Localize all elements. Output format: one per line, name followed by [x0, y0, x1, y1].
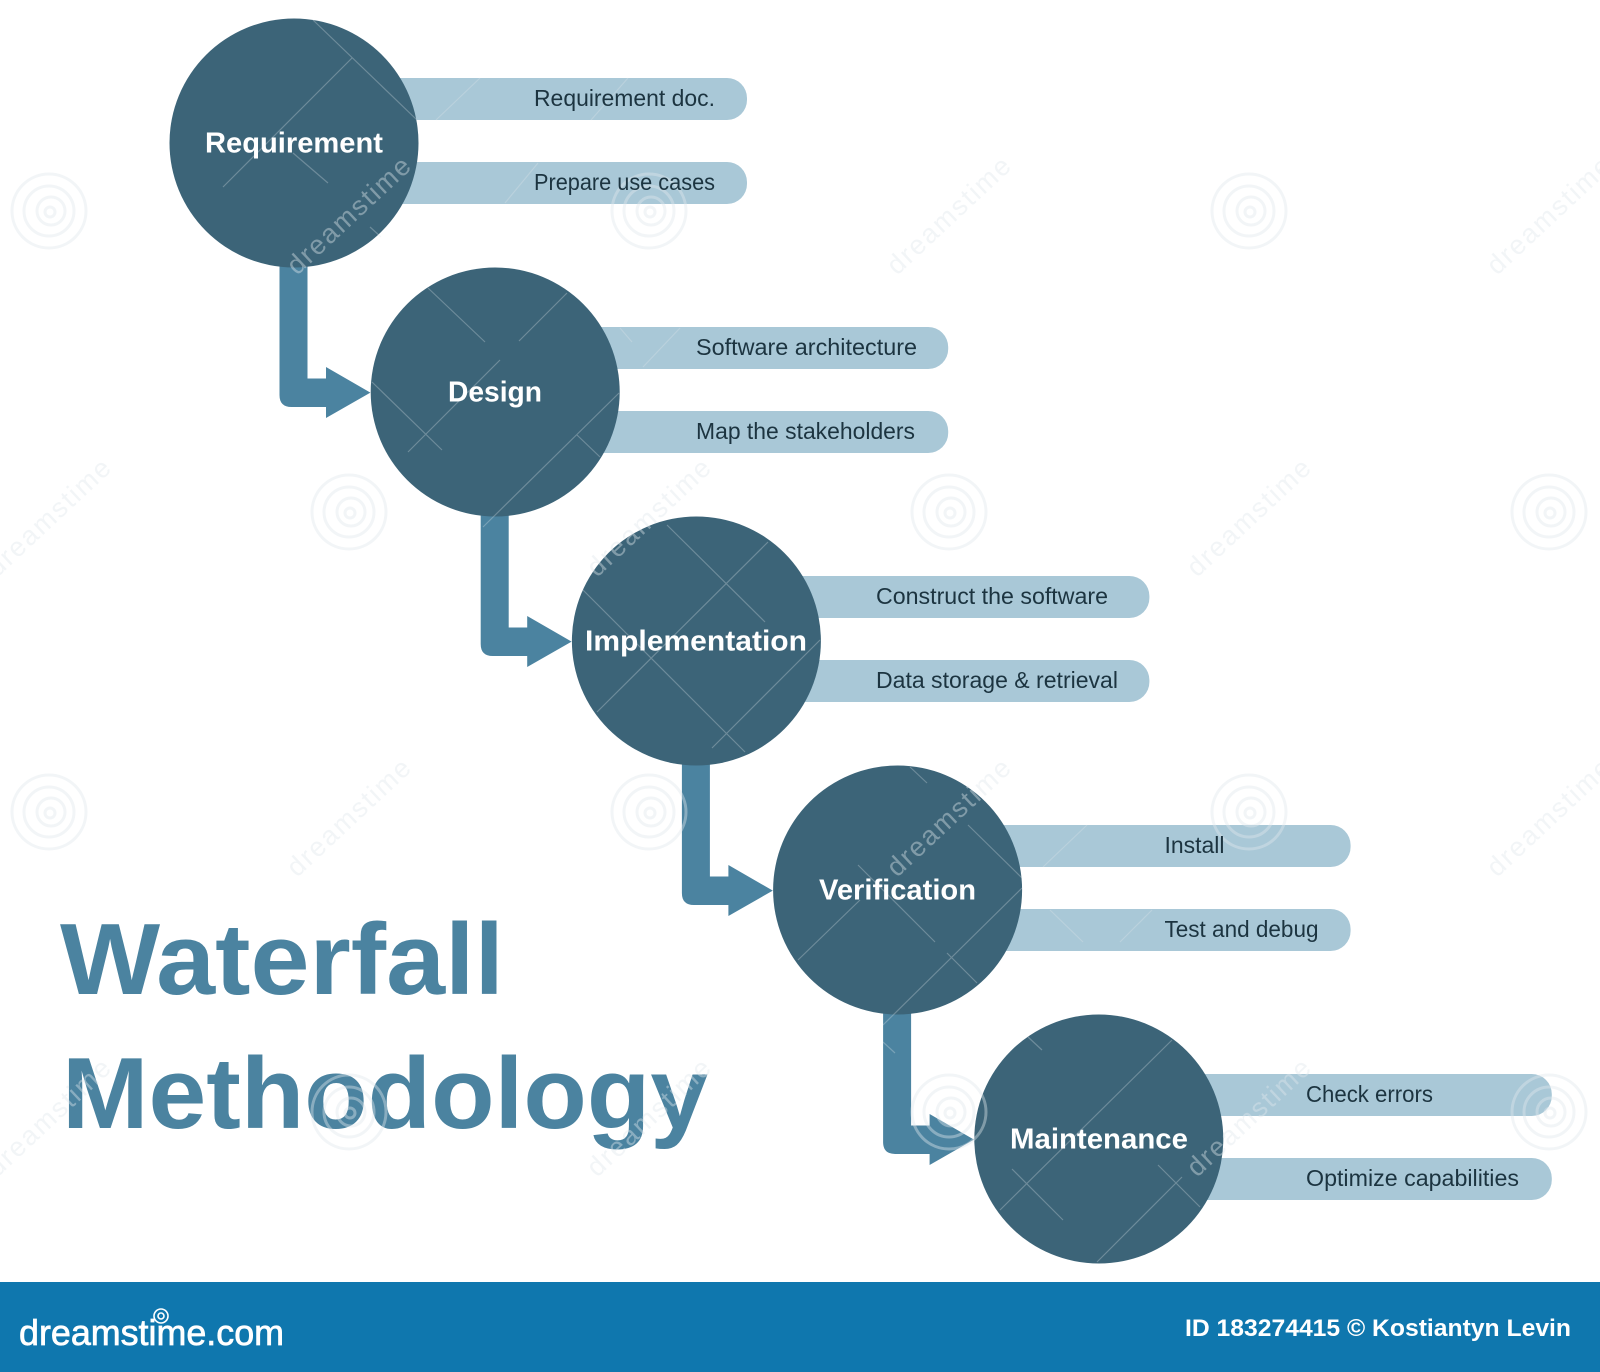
circle: design: [371, 268, 620, 516]
bar: check errors: [1159, 1074, 1552, 1116]
text: test and debug: Test and debug: [1164, 916, 1318, 942]
arrow: requirement to design: [280, 262, 370, 418]
text: software architecture: Software architecture: [696, 334, 917, 360]
bar: construct the software: [756, 576, 1149, 618]
footer band: [0, 1282, 1600, 1372]
bar: test and debug: [958, 909, 1351, 951]
text: check errors: Check errors: [1306, 1081, 1433, 1107]
bar: install: [958, 825, 1351, 867]
arrow: design to implementation: [481, 511, 572, 667]
watermark text: dreamstime: [281, 753, 417, 882]
text: requirement doc: Requirement doc.: [534, 85, 715, 111]
bar: software architecture: [555, 327, 948, 369]
step: verification: [773, 766, 1351, 1014]
step: maintenance: [974, 1014, 1552, 1264]
icon: logo spiral: [154, 1309, 168, 1323]
footer logo text: dreamstime.com: [19, 1312, 284, 1353]
title: Waterfall: [60, 904, 504, 1016]
watermark text: dreamstime: [281, 151, 417, 280]
label: maintenance: Maintenance: [1010, 1124, 1188, 1156]
label: requirement: Requirement: [205, 128, 383, 160]
text: data storage and retrieval: Data storage & retrieval: [876, 667, 1118, 693]
circle and bar labels: [205, 85, 1519, 1191]
text: map the stakeholders: Map the stakeholders: [696, 418, 915, 444]
step: implementation: [572, 516, 1149, 766]
text: construct the software: Construct the software: [876, 583, 1108, 609]
watermark text: [0, 151, 1600, 1182]
step: requirement: [170, 18, 747, 268]
bar: data storage and retrieval: [756, 660, 1149, 702]
arrow: implementation to verification: [682, 760, 773, 916]
watermark text: dreamstime: [1181, 1053, 1317, 1182]
watermark spirals: [12, 174, 1586, 1149]
watermark diagonal lines: [223, 20, 1200, 1262]
bar: prepare use cases: [354, 162, 747, 204]
bar: optimize capabilities: [1159, 1158, 1552, 1200]
text: optimize capabilities: Optimize capabilities: [1306, 1165, 1519, 1191]
watermark text: dreamstime: [1181, 453, 1317, 582]
circle: maintenance: [974, 1014, 1223, 1264]
footer credit: ID 183274415 © Kostiantyn Levin: [1185, 1315, 1571, 1342]
watermark text: dreamstime: [581, 453, 717, 582]
circle: implementation: [572, 516, 821, 766]
title: [60, 904, 708, 1150]
arrow: verification to maintenance: [883, 1009, 974, 1165]
circle: verification: [773, 766, 1022, 1014]
title: Methodology: [62, 1038, 708, 1150]
watermark text: dreamstime: [881, 151, 1017, 280]
watermark text: dreamstime: [881, 753, 1017, 882]
step: design: [371, 268, 948, 516]
label: design: Design: [448, 376, 542, 408]
label: implementation: Implementation: [585, 626, 807, 658]
label: verification: Verification: [819, 874, 976, 906]
bar: requirement doc: [354, 78, 747, 120]
watermark text: dreamstime: [581, 1053, 717, 1182]
text: prepare use cases: Prepare use cases: [534, 169, 715, 195]
text: install: Install: [1164, 832, 1224, 858]
bar: map the stakeholders: [555, 411, 948, 453]
circle: requirement: [170, 18, 418, 268]
